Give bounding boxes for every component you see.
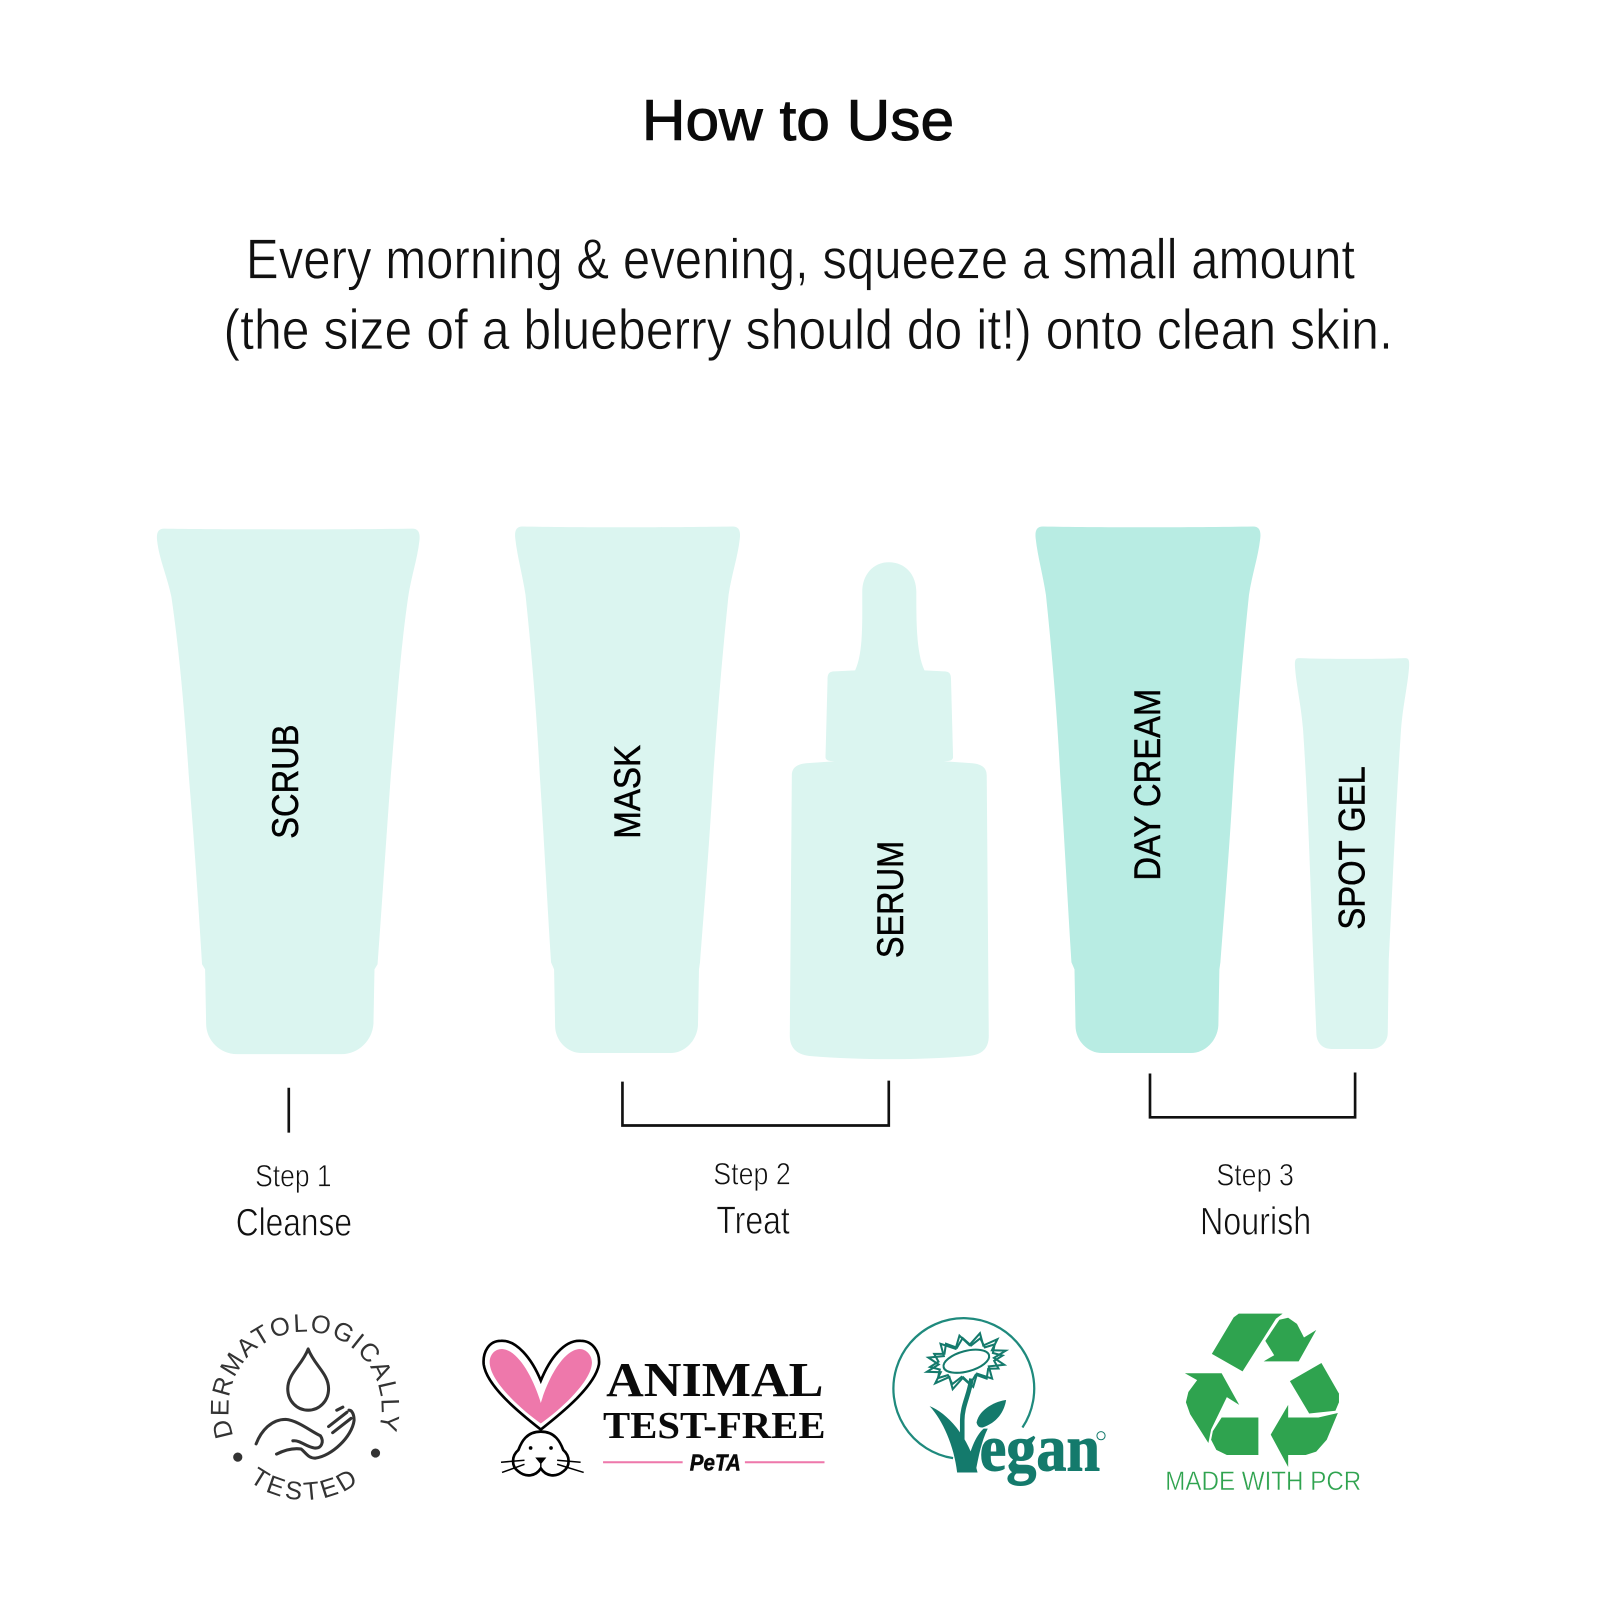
step 1 label: Cleanse: [236, 1202, 352, 1245]
instructions text: Every morning & evening, squeeze a small amount: [246, 228, 1355, 291]
tube: scrub: [157, 529, 420, 1054]
step 1 label: [236, 1158, 352, 1245]
step 3 bracket: [1150, 1072, 1355, 1117]
title: How to Use: [642, 89, 954, 153]
badge: dermatologically tested: [210, 1314, 400, 1500]
step 2 label: [713, 1156, 791, 1243]
badge: peta animal test-free: TEST-FREE: [603, 1405, 826, 1447]
tube: spot gel: [1295, 658, 1409, 1049]
tube: mask: [515, 527, 740, 1053]
icon: recycle arrows: [1185, 1314, 1339, 1467]
step 3 label: Nourish: [1200, 1201, 1311, 1244]
step 2 label: Treat: [716, 1200, 790, 1243]
icon: drop and hand: [256, 1349, 354, 1458]
icon: bunny heart ears: [484, 1341, 599, 1475]
instructions text: [223, 228, 1393, 361]
badge: peta animal test-free: PeTA: [690, 1449, 741, 1475]
icon: sunflower: [920, 1324, 1013, 1398]
step 1 label: Step 1: [255, 1158, 332, 1194]
label: serum: SERUM: [870, 841, 911, 958]
badge: peta animal test-free: [484, 1341, 826, 1475]
label: mask: MASK: [607, 744, 648, 839]
badge: recycle made with pcr: MADE WITH PCR: [1165, 1466, 1361, 1496]
badge: vegan: egan: [980, 1412, 1100, 1485]
badge: dermatologically tested: TESTED: [254, 1466, 355, 1500]
step 2 label: Step 2: [713, 1156, 791, 1192]
badge: vegan: [893, 1318, 1105, 1485]
badge: recycle made with pcr: [1165, 1314, 1361, 1496]
label: scrub: SCRUB: [265, 724, 306, 839]
step 1 marker line: [287, 1088, 290, 1133]
step 2 bracket: [622, 1081, 889, 1126]
label: day cream: DAY CREAM: [1127, 689, 1168, 881]
tube: day cream: [1035, 527, 1260, 1053]
badge: dermatologically tested: DERMATOLOGICALLY: [210, 1314, 400, 1438]
label: spot gel: SPOT GEL: [1331, 766, 1372, 930]
dropper bottle: serum: [790, 562, 989, 1059]
instructions text: (the size of a blueberry should do it!) onto clean skin.: [223, 298, 1393, 361]
step 3 label: [1200, 1157, 1311, 1244]
badge: peta animal test-free: ANIMAL: [606, 1352, 823, 1407]
step 3 label: Step 3: [1216, 1157, 1294, 1193]
